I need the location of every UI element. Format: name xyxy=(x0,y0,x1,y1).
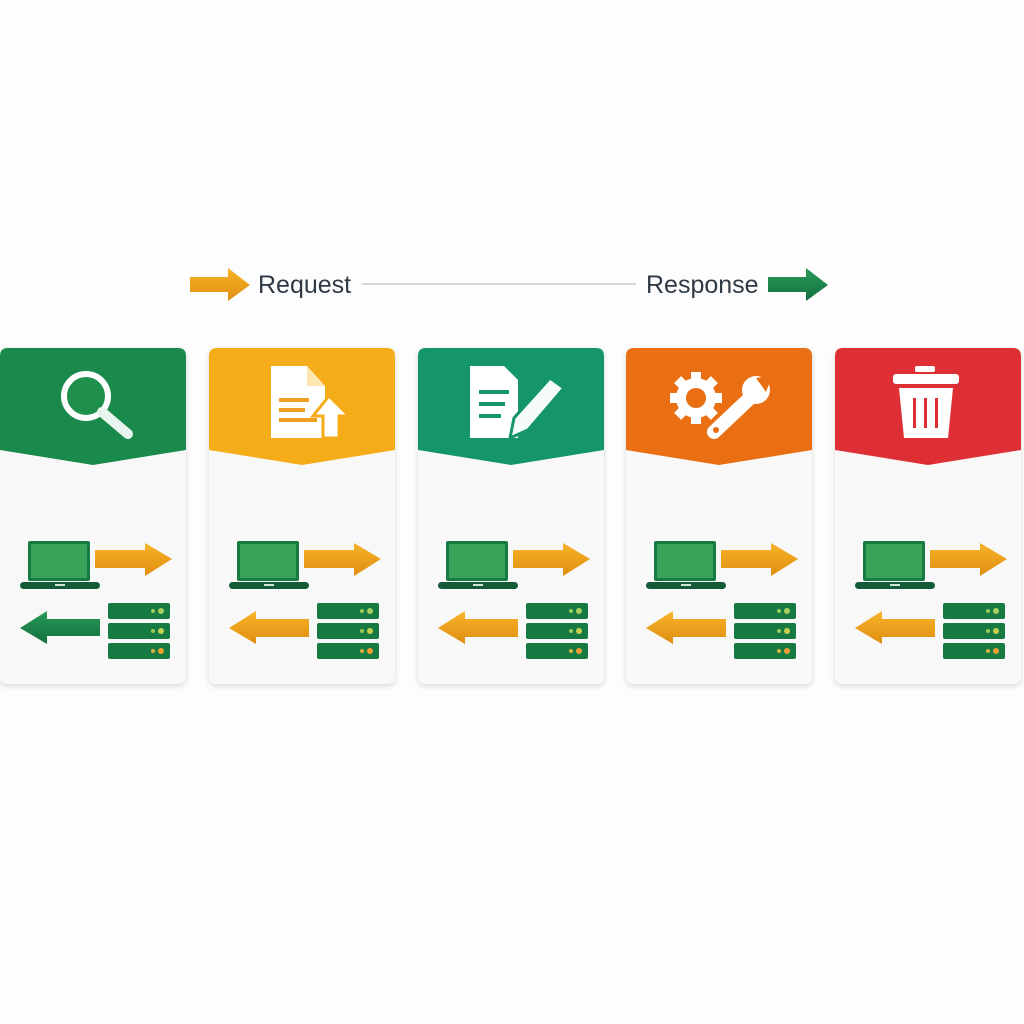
flow: laptop to server xyxy=(20,541,172,659)
icon: document upload xyxy=(271,366,349,438)
request label: Request xyxy=(258,271,351,299)
icon: document with pencil xyxy=(470,366,564,438)
card 5: delete (DELETE) xyxy=(835,348,1021,684)
request arrow xyxy=(190,268,250,301)
flow: laptop to server xyxy=(646,541,798,659)
card 4: settings (PATCH) xyxy=(626,348,812,684)
response label: Response xyxy=(646,271,759,299)
flow: laptop to server xyxy=(438,541,590,659)
card 3: edit (PUT) xyxy=(418,348,604,684)
icon: trash can xyxy=(893,366,959,438)
response arrow xyxy=(768,268,828,301)
icon: magnifier xyxy=(64,374,128,434)
icon: gear and wrench xyxy=(670,372,772,433)
card 2: upload (POST) xyxy=(209,348,395,684)
flow: laptop to server xyxy=(855,541,1007,659)
legend: request/response xyxy=(190,268,828,301)
card 1: search (GET) xyxy=(0,348,186,684)
flow: laptop to server xyxy=(229,541,381,659)
